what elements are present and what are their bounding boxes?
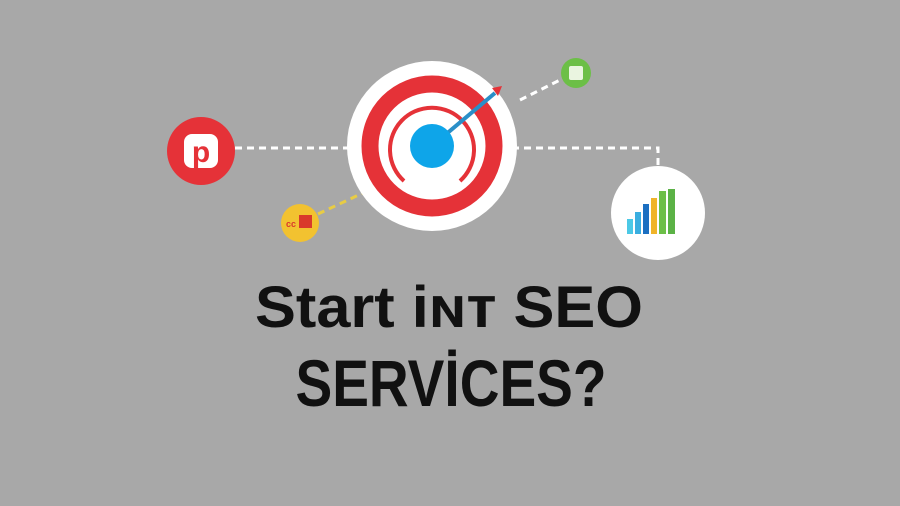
icon: pinterest [167,117,235,185]
connector: target to chart [512,148,658,168]
icon: central target [347,61,517,231]
icon: yellow envelope: cc [286,219,296,229]
icon: yellow envelope [281,204,319,242]
connector: target to green icon [520,80,560,100]
title line 1: Start iɴᴛ SEO [255,275,643,340]
icon: bar chart [611,166,705,260]
icon: pinterest: p [192,136,210,169]
title line 2: SERVİCES? [296,346,606,420]
connector: pinterest to target [235,146,350,150]
icon: green document [561,58,591,88]
connector: yellow icon to target [318,192,365,214]
